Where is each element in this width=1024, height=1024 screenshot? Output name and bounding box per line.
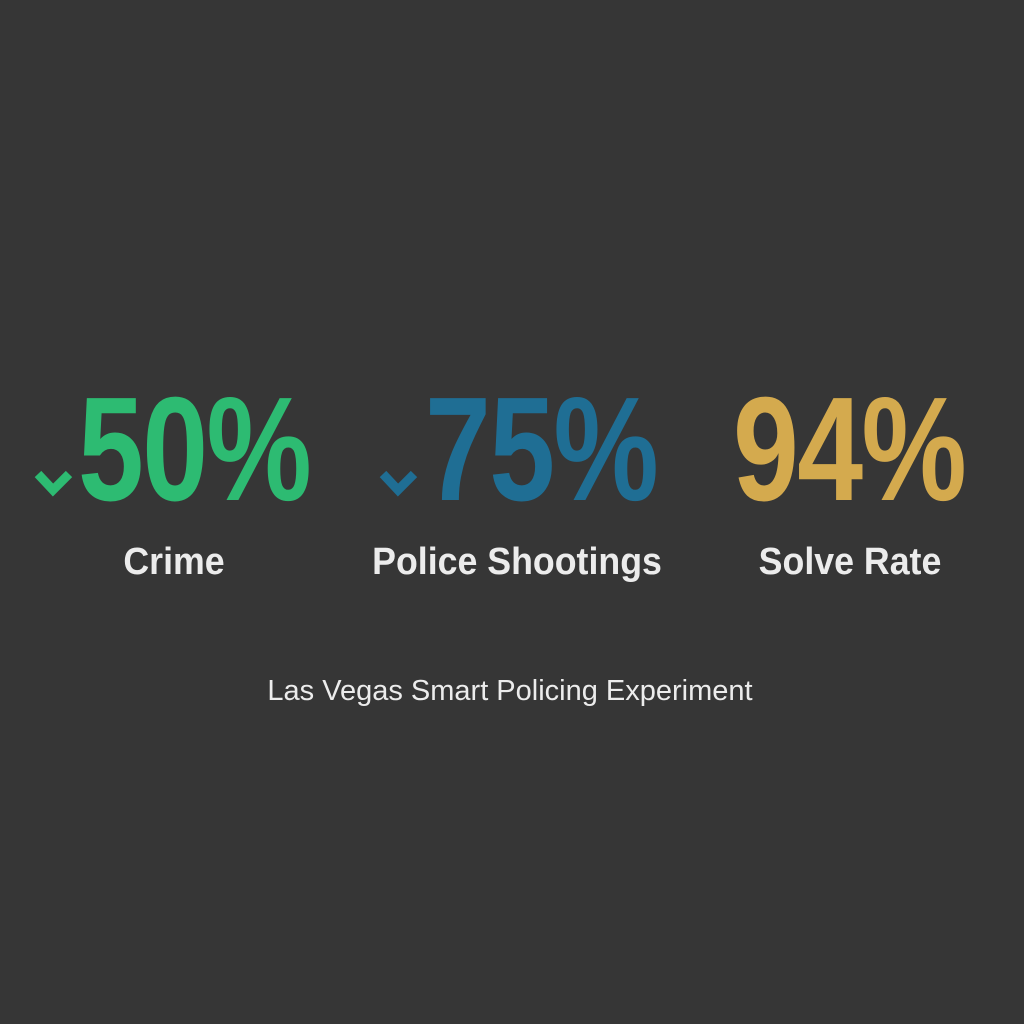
stat: crime bbox=[34, 367, 310, 532]
icon: blue down chevron bbox=[380, 471, 418, 496]
number: 75%: 75% bbox=[425, 367, 657, 532]
number: 50%: 50% bbox=[78, 367, 310, 532]
subtitle: Las Vegas Smart Policing Experiment bbox=[267, 675, 753, 707]
icon: green down chevron bbox=[34, 471, 72, 496]
stat: police shootings bbox=[380, 367, 657, 532]
label: solve rate: Solve Rate bbox=[759, 541, 941, 583]
label: police shootings: Police Shootings bbox=[372, 541, 662, 583]
label: crime: Crime bbox=[123, 541, 225, 583]
number: 94%: 94% bbox=[733, 367, 965, 532]
